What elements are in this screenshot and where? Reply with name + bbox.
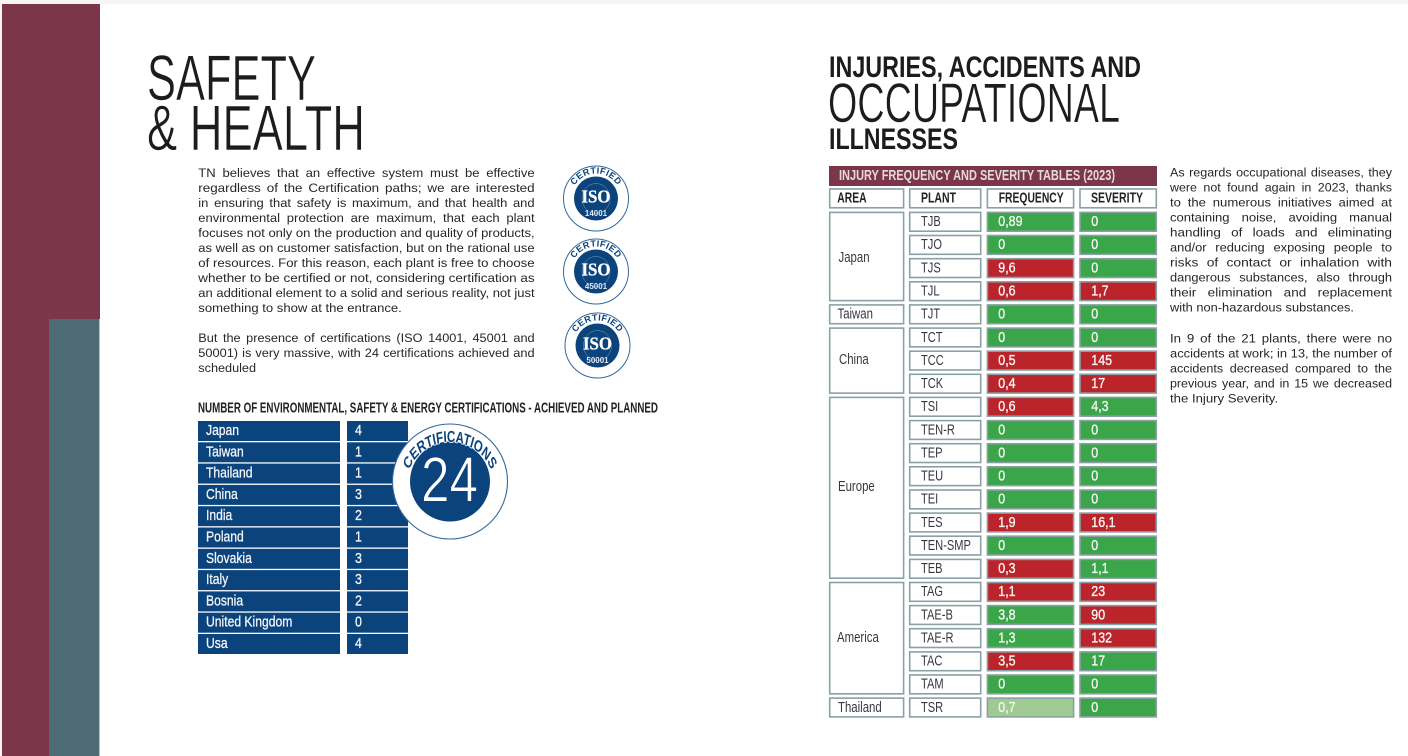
- row: TEB: 1,1: [1091, 560, 1109, 576]
- icon: ISO 14001 badge: ISO: [582, 186, 610, 206]
- heading: injuries, accidents and occupational illnesses: INJURIES, ACCIDENTS AND: [829, 51, 1141, 84]
- row: Taiwan: [198, 442, 408, 462]
- row: India: [198, 506, 408, 526]
- row: TCT: [910, 328, 1156, 347]
- row: TEN-SMP: 0: [998, 537, 1006, 553]
- text block: safety intro: whether to be certified or not, considering certification as: [197, 271, 535, 285]
- row: TSI: 0,6: [998, 398, 1016, 414]
- area: Japan: Japan: [838, 248, 870, 265]
- row: TJO: [910, 236, 1156, 254]
- row: United Kingdom: [198, 613, 408, 633]
- text block: accidents at work: accidents at work; in 13, the number of: [1170, 346, 1393, 360]
- row: TAE-R: 1,3: [998, 629, 1016, 646]
- text block: accidents at work: accidents decreased compared to the: [1170, 362, 1392, 376]
- row: TSR: 0,7: [998, 699, 1016, 715]
- row: China: [198, 485, 408, 505]
- row: TSI: TSI: [921, 397, 938, 415]
- row: TEP: [910, 444, 1156, 462]
- text block: accidents at work: In 9 of the 21 plants, there were no: [1170, 332, 1392, 346]
- row: TCK: 17: [1091, 375, 1105, 391]
- row: TCK: 0,4: [998, 375, 1016, 391]
- row: Japan: 4: [355, 422, 362, 438]
- icon: ISO 50001 badge: CERTIFIED: [572, 314, 622, 332]
- row: China: China: [206, 486, 238, 502]
- table header row: SEVERITY: [1091, 189, 1143, 206]
- text block: safety intro: as well as on customer satisfaction, but on the rational use: [198, 241, 535, 255]
- text block: occupational diseases: containing noise, avoiding manual: [1170, 210, 1392, 224]
- row: Usa: Usa: [206, 635, 228, 651]
- text block: accidents at work: [1170, 332, 1393, 406]
- text block: safety intro: of resources. For this reason, each plant is free to choose: [198, 256, 535, 270]
- row: TJT: 0: [1091, 306, 1099, 322]
- heading: injuries, accidents and occupational illnesses: [828, 51, 1141, 156]
- row: TES: 16,1: [1091, 514, 1116, 530]
- icon: ISO 45001 badge: 45001: [585, 282, 608, 291]
- row: Thailand: [198, 464, 408, 484]
- row: TCT: 0: [1091, 329, 1099, 345]
- table header row: FREQUENCY: [999, 189, 1064, 206]
- row: TCC: [910, 351, 1156, 370]
- row: TEP: 0: [998, 444, 1006, 461]
- text block: certifications presence: But the presence of certifications (ISO 14001, 45001 and: [198, 331, 535, 345]
- text block: accidents at work: previous year, and in 15 we decreased: [1170, 376, 1392, 390]
- row: Italy: Italy: [206, 571, 228, 587]
- row: TEU: [910, 467, 1156, 486]
- title: Safety & Health: SAFETY: [147, 42, 316, 114]
- text block: occupational diseases: were not found again in 2023, thanks: [1169, 180, 1392, 194]
- text block: certifications presence: scheduled: [198, 361, 256, 375]
- area: Thailand: [830, 698, 904, 717]
- row: TAE-B: 3,8: [998, 606, 1016, 623]
- row: Bosnia: [198, 591, 408, 611]
- text block: occupational diseases: with non-hazardous substances.: [1169, 300, 1354, 314]
- row: TJS: 9,6: [998, 259, 1016, 276]
- row: United Kingdom: United Kingdom: [206, 614, 292, 630]
- text block: occupational diseases: As regards occupational diseases, they: [1170, 166, 1393, 180]
- text block: safety intro: environmental protection are maximum, that each plant: [198, 211, 535, 225]
- heading: certifications table: NUMBER OF ENVIRONMENTAL, SAFETY & ENERGY CERTIFICATIONS - ACHIEVED AND PLANNED: [198, 400, 658, 416]
- text block: safety intro: focuses not only on the production and quality of products,: [198, 226, 535, 240]
- row: Italy: 3: [355, 571, 362, 587]
- text block: safety intro: in ensuring that safety is maximum, and that health and: [198, 196, 535, 210]
- table header row: AREA: [837, 189, 867, 206]
- row: TJB: 0,89: [998, 213, 1023, 229]
- area: Taiwan: Taiwan: [838, 305, 873, 322]
- row: TJL: 0,6: [998, 282, 1016, 299]
- row: Japan: Japan: [206, 422, 239, 438]
- callout: 24 certifications badge: 24: [421, 444, 478, 516]
- icon: ISO 45001 badge: ISO: [582, 260, 610, 280]
- row: TES: TES: [921, 513, 943, 530]
- area: America: America: [837, 628, 879, 645]
- row: TAM: [910, 675, 1156, 694]
- text block: occupational diseases: to the numerous initiatives aimed at: [1170, 196, 1393, 210]
- row: TCC: 0,5: [998, 352, 1016, 368]
- row: TAM: TAM: [921, 675, 944, 692]
- row: TEP: 0: [1091, 444, 1099, 461]
- row: TEU: 0: [1091, 467, 1099, 484]
- heading: injuries, accidents and occupational illnesses: ILLNESSES: [829, 123, 958, 156]
- row: TAM: 0: [1091, 676, 1099, 692]
- row: TJB: TJB: [921, 212, 941, 230]
- row: TEN-SMP: [910, 536, 1156, 555]
- table: certifications by country: [198, 421, 408, 654]
- row: TCK: [910, 374, 1156, 393]
- title: Safety & Health: & HEALTH: [147, 92, 365, 164]
- row: TAC: TAC: [921, 652, 943, 669]
- row: TJB: [910, 212, 1156, 231]
- row: Bosnia: 2: [355, 592, 362, 609]
- row: TAM: 0: [998, 676, 1006, 692]
- row: TSI: 4,3: [1091, 398, 1109, 414]
- row: TAC: 3,5: [998, 653, 1016, 669]
- row: TJL: TJL: [921, 282, 939, 299]
- row: TSR: [910, 698, 1156, 717]
- row: TES: [910, 513, 1156, 532]
- row: United Kingdom: 0: [355, 614, 362, 630]
- callout: 24 certifications badge: CERTIFICATIONS: [404, 430, 497, 468]
- row: TEP: TEP: [921, 444, 943, 461]
- row: TAG: 1,1: [998, 583, 1016, 599]
- row: TAE-B: TAE-B: [921, 606, 953, 623]
- row: Thailand: Thailand: [206, 464, 253, 481]
- text block: safety intro: TN believes that an effective system must be effective: [198, 166, 535, 180]
- area: Thailand: Thailand: [838, 698, 882, 715]
- area: Taiwan: [830, 305, 904, 324]
- row: TJT: 0: [998, 306, 1006, 322]
- icon: ISO 50001 badge: 50001: [586, 356, 609, 365]
- area: America: [830, 582, 904, 694]
- row: TEN-R: 0: [998, 421, 1006, 438]
- text block: safety intro: [197, 166, 535, 315]
- row: TEU: TEU: [921, 467, 943, 484]
- area: Europe: [830, 397, 904, 578]
- row: TEI: [910, 490, 1156, 509]
- row: TEN-R: TEN-R: [921, 421, 955, 438]
- row: TAG: [910, 582, 1156, 601]
- text block: occupational diseases: handling of loads and eliminating: [1170, 226, 1392, 240]
- row: TEB: 0,3: [998, 560, 1016, 576]
- row: TCT: TCT: [921, 328, 943, 345]
- row: TCC: 145: [1091, 352, 1112, 368]
- table title bar: INJURY FREQUENCY AND SEVERITY TABLES (2023): [839, 167, 1115, 184]
- row: TJS: TJS: [921, 259, 941, 276]
- row: TJO: 0: [1091, 236, 1099, 252]
- row: TEN-R: [910, 421, 1156, 439]
- row: TAE-R: TAE-R: [921, 629, 953, 646]
- row: TEN-SMP: 0: [1091, 537, 1099, 553]
- row: TJO: TJO: [921, 236, 942, 253]
- row: TAE-R: 132: [1091, 629, 1112, 646]
- text block: occupational diseases: risks of contact or inhalation with: [1170, 256, 1392, 270]
- text block: certifications presence: [198, 331, 535, 375]
- row: TAG: TAG: [921, 583, 943, 600]
- row: TAC: 17: [1091, 653, 1105, 669]
- text block: accidents at work: the Injury Severity.: [1170, 392, 1278, 406]
- callout: 24 certifications badge: [392, 424, 508, 540]
- row: Poland: [198, 528, 408, 548]
- row: TSR: TSR: [921, 698, 943, 715]
- icon: ISO 14001 badge: 14001: [585, 209, 608, 218]
- row: Poland: 1: [355, 528, 362, 545]
- panel: left colour band: [2, 4, 100, 756]
- text block: certifications presence: 50001) is very massive, with 24 certifications achieved and: [198, 346, 535, 360]
- row: Thailand: 1: [355, 465, 362, 481]
- row: TEI: TEI: [921, 490, 938, 507]
- row: TJS: 0: [1091, 259, 1099, 276]
- text block: safety intro: an additional element to a solid and serious reality, not just: [198, 286, 535, 300]
- row: TEN-SMP: TEN-SMP: [921, 536, 971, 553]
- row: TAG: 23: [1091, 583, 1105, 599]
- row: TEU: 0: [998, 467, 1006, 484]
- row: Slovakia: 3: [355, 550, 362, 566]
- row: TAE-B: [910, 606, 1156, 624]
- row: TAE-B: 90: [1091, 606, 1105, 623]
- table header row: [830, 189, 1156, 208]
- text block: safety intro: regardless of the Certification paths; we are interested: [198, 181, 535, 195]
- icon: ISO 45001 badge: CERTIFIED: [570, 240, 621, 258]
- row: Japan: [198, 421, 408, 441]
- row: TJS: [910, 259, 1156, 278]
- row: India: 2: [355, 507, 362, 523]
- row: TJB: 0: [1091, 213, 1099, 229]
- row: TCC: TCC: [921, 351, 944, 368]
- area: Japan: [830, 212, 904, 301]
- icon: ISO 50001 badge: ISO: [583, 334, 612, 354]
- row: Italy: [198, 570, 408, 590]
- row: TAE-R: [910, 629, 1156, 648]
- row: TEB: [910, 559, 1156, 578]
- row: China: 3: [355, 486, 362, 502]
- row: TEI: 0: [1091, 491, 1099, 507]
- title: Safety & Health: [147, 42, 365, 164]
- row: TCT: 0: [998, 329, 1006, 345]
- area: China: [830, 328, 904, 393]
- panel: injury frequency and severity table: [829, 166, 1157, 717]
- row: TEI: 0: [998, 491, 1006, 507]
- area: Europe: Europe: [838, 477, 875, 494]
- text block: safety intro: something to show at the entrance.: [198, 301, 402, 315]
- text block: occupational diseases: their elimination and replacement: [1170, 286, 1393, 300]
- text block: occupational diseases: dangerous substances, also through: [1170, 270, 1392, 284]
- row: TJT: TJT: [921, 305, 940, 322]
- row: TJT: [910, 305, 1156, 324]
- row: Poland: Poland: [206, 528, 244, 545]
- row: TJL: [910, 282, 1156, 301]
- row: TAC: [910, 652, 1156, 671]
- icon: ISO 14001 badge: CERTIFIED: [570, 167, 621, 184]
- row: TJO: 0: [998, 236, 1006, 252]
- row: Taiwan: Taiwan: [206, 443, 244, 460]
- row: TJL: 1,7: [1091, 282, 1109, 299]
- icon: ISO 50001 badge: [564, 312, 630, 378]
- text block: occupational diseases: [1169, 166, 1393, 314]
- row: Slovakia: Slovakia: [206, 550, 252, 566]
- row: TSI: [910, 397, 1156, 416]
- icon: ISO 14001 badge: [563, 166, 629, 232]
- row: Bosnia: Bosnia: [206, 592, 243, 609]
- row: TCK: TCK: [921, 374, 943, 391]
- row: TSR: 0: [1091, 699, 1099, 715]
- row: TEB: TEB: [921, 559, 943, 577]
- row: Usa: 4: [355, 635, 362, 651]
- table header row: PLANT: [921, 189, 956, 206]
- row: Slovakia: [198, 549, 408, 569]
- row: Usa: [198, 634, 408, 654]
- icon: ISO 45001 badge: [563, 238, 629, 304]
- row: India: India: [206, 507, 233, 523]
- heading: injuries, accidents and occupational illnesses: OCCUPATIONAL: [828, 71, 1120, 134]
- row: TEN-R: 0: [1091, 421, 1099, 438]
- row: Taiwan: 1: [355, 443, 362, 460]
- text block: occupational diseases: and/or reducing exposing people to: [1170, 240, 1392, 254]
- area: China: China: [839, 350, 869, 367]
- row: TES: 1,9: [998, 514, 1016, 530]
